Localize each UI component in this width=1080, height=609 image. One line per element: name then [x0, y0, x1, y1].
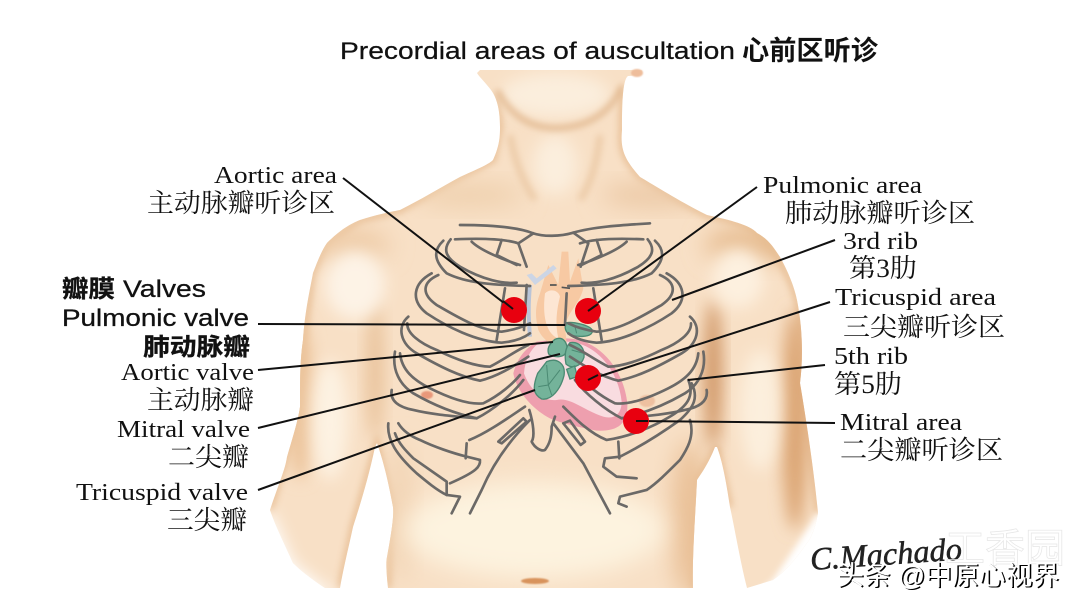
- lower right ribs: [553, 380, 695, 513]
- label: Pulmonic area: 肺动脉瓣听诊区: [785, 199, 975, 228]
- label: Aortic area: Aortic area: [214, 163, 337, 189]
- heading: Valves: Valves: [123, 276, 206, 303]
- heading: Valves: 瓣膜: [62, 276, 115, 303]
- lower left ribs: [388, 407, 530, 513]
- label: Aortic valve: [121, 360, 254, 415]
- illustration: male torso: [250, 69, 840, 600]
- source watermark: 头条 @中原心视界: [838, 562, 1060, 592]
- artist signature: C.Machado: [809, 530, 963, 577]
- label: Tricuspid area: Tricuspid area: [835, 285, 996, 311]
- label: Tricuspid area: [835, 285, 1005, 342]
- label: 3rd rib: 3rd rib: [843, 229, 918, 255]
- faint watermark: 工香园: [945, 527, 1065, 571]
- heart: [513, 252, 627, 431]
- auscultation points: [501, 297, 649, 434]
- label: Mitral valve: Mitral valve: [117, 417, 250, 443]
- heading: Valves: Pulmonic valve: [62, 305, 249, 332]
- label: Tricuspid valve: 三尖瓣: [167, 506, 247, 535]
- aorta and great vessels: [527, 252, 583, 345]
- label: Tricuspid valve: [76, 480, 248, 535]
- label: Mitral valve: 二尖瓣: [168, 443, 249, 472]
- label: 5th rib: 第5肋: [834, 370, 902, 399]
- label: Mitral area: [840, 410, 1003, 465]
- heading: Valves: [62, 276, 250, 361]
- nipples: [421, 391, 655, 407]
- leader lines: [258, 178, 835, 490]
- label: 5th rib: 5th rib: [834, 344, 908, 370]
- clavicles and sternum: [460, 223, 650, 450]
- heart valves: [534, 322, 593, 399]
- ear detail: [631, 69, 643, 77]
- title: [340, 36, 879, 66]
- label: Tricuspid area: 三尖瓣听诊区: [843, 313, 1005, 342]
- label: Aortic valve: 主动脉瓣: [147, 386, 254, 415]
- title: Precordial areas of auscultation: [340, 38, 735, 65]
- label: Mitral area: Mitral area: [840, 410, 962, 436]
- label: Pulmonic area: Pulmonic area: [763, 173, 922, 199]
- label: 3rd rib: 第3肋: [849, 254, 917, 283]
- label: 5th rib: [834, 344, 908, 399]
- label: Aortic area: [147, 163, 337, 218]
- title: 心前区听诊: [742, 36, 879, 66]
- label: Mitral valve: [117, 417, 250, 472]
- navel: [521, 578, 549, 584]
- label: Pulmonic area: [763, 173, 975, 228]
- rib cage: [388, 223, 707, 513]
- label: Aortic valve: Aortic valve: [121, 360, 254, 386]
- label: Aortic area: 主动脉瓣听诊区: [147, 189, 335, 218]
- label: 3rd rib: [843, 229, 918, 283]
- heading: Valves: 肺动脉瓣: [143, 334, 250, 361]
- label: Tricuspid valve: Tricuspid valve: [76, 480, 248, 506]
- label: Mitral area: 二尖瓣听诊区: [840, 436, 1003, 465]
- source watermark: 头条 @中原心视界: [837, 561, 1059, 591]
